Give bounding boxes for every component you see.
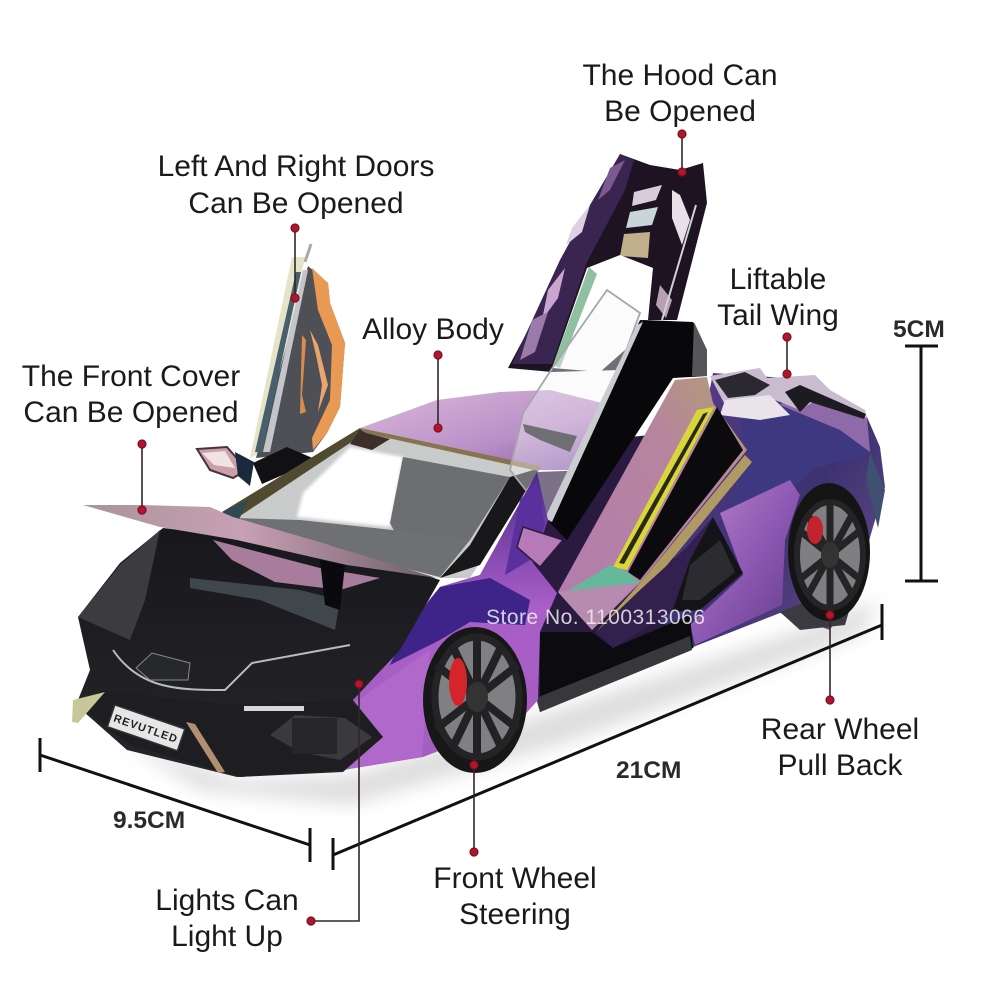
- callout: hood: The Hood Can: [582, 59, 778, 92]
- roof reflections behind glass: [523, 424, 577, 452]
- callout: tail wing: Tail Wing: [717, 299, 839, 332]
- callout: tail wing: [717, 263, 839, 378]
- callout: doors: [158, 150, 434, 302]
- door mirror: [517, 527, 563, 567]
- dimension: width 9.5CM: [40, 738, 310, 862]
- raised hood panel: [508, 154, 707, 372]
- callout: alloy body: [362, 313, 504, 432]
- lower door sill section: [536, 517, 743, 712]
- callout: hood: Be Opened: [604, 95, 756, 128]
- dimension: length 21CM: 21CM: [616, 757, 681, 784]
- callout: lights: Lights Can: [155, 884, 299, 917]
- front cover panel: [83, 505, 437, 578]
- ground shadow: [120, 600, 880, 805]
- callout: front cover: Can Be Opened: [23, 396, 239, 429]
- windshield and interior: [222, 428, 540, 578]
- model car illustration: [72, 154, 885, 777]
- callout: alloy body: Alloy Body: [362, 313, 504, 346]
- callout: tail wing: Liftable: [730, 263, 826, 296]
- open door: [545, 320, 752, 632]
- license plate: REVUTLED: [112, 713, 179, 746]
- callout: rear wheel: Rear Wheel: [761, 713, 919, 746]
- callout: front wheel: Steering: [459, 898, 571, 931]
- roof: [360, 390, 610, 470]
- callout: front wheel: [433, 761, 597, 931]
- callout: rear wheel: Pull Back: [777, 749, 904, 782]
- dimension: length 21CM: [333, 604, 882, 870]
- front fender: [343, 472, 557, 770]
- callout: hood: [582, 59, 778, 176]
- front wheel: [423, 627, 527, 773]
- callout: doors: Can Be Opened: [188, 187, 404, 220]
- rear body and fender: [660, 373, 885, 647]
- tail wing: [710, 368, 867, 420]
- callout: front cover: [22, 360, 240, 514]
- license plate: [107, 705, 185, 751]
- callout: front wheel: Front Wheel: [433, 862, 597, 895]
- front nose and engine bay: [72, 528, 440, 777]
- rear wheel: [788, 483, 870, 621]
- callout: rear wheel: [761, 611, 919, 782]
- mid body backing: [440, 430, 750, 712]
- dimension: height 5CM: 5CM: [893, 316, 945, 343]
- dimension: height 5CM: [893, 316, 945, 581]
- left door raised: [250, 244, 345, 484]
- callout: lights: Light Up: [171, 920, 283, 953]
- raised glass window: [510, 290, 640, 517]
- callout: lights: [155, 680, 363, 953]
- watermark: Store No. 1100313066: [486, 606, 705, 629]
- callout: doors: Left And Right Doors: [158, 150, 434, 183]
- callout: front cover: The Front Cover: [22, 360, 240, 393]
- dimension: width 9.5CM: 9.5CM: [113, 807, 185, 834]
- side mirror: [197, 447, 254, 486]
